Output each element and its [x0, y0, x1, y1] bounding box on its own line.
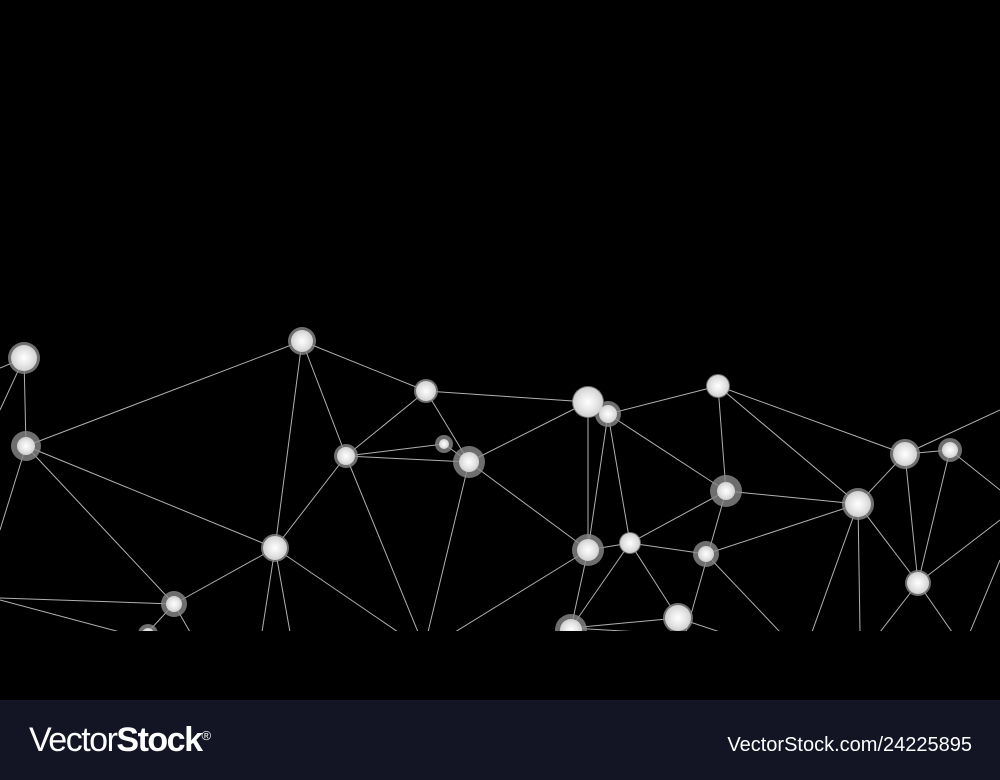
- footer bar: [0, 700, 1000, 780]
- image id text: VectorStock.com/24225895: [727, 734, 972, 756]
- connecting lines: [0, 341, 1000, 632]
- network graphic: [0, 327, 1000, 631]
- logo: VectorStock: VectorStock®: [29, 721, 210, 759]
- nodes: [8, 327, 962, 646]
